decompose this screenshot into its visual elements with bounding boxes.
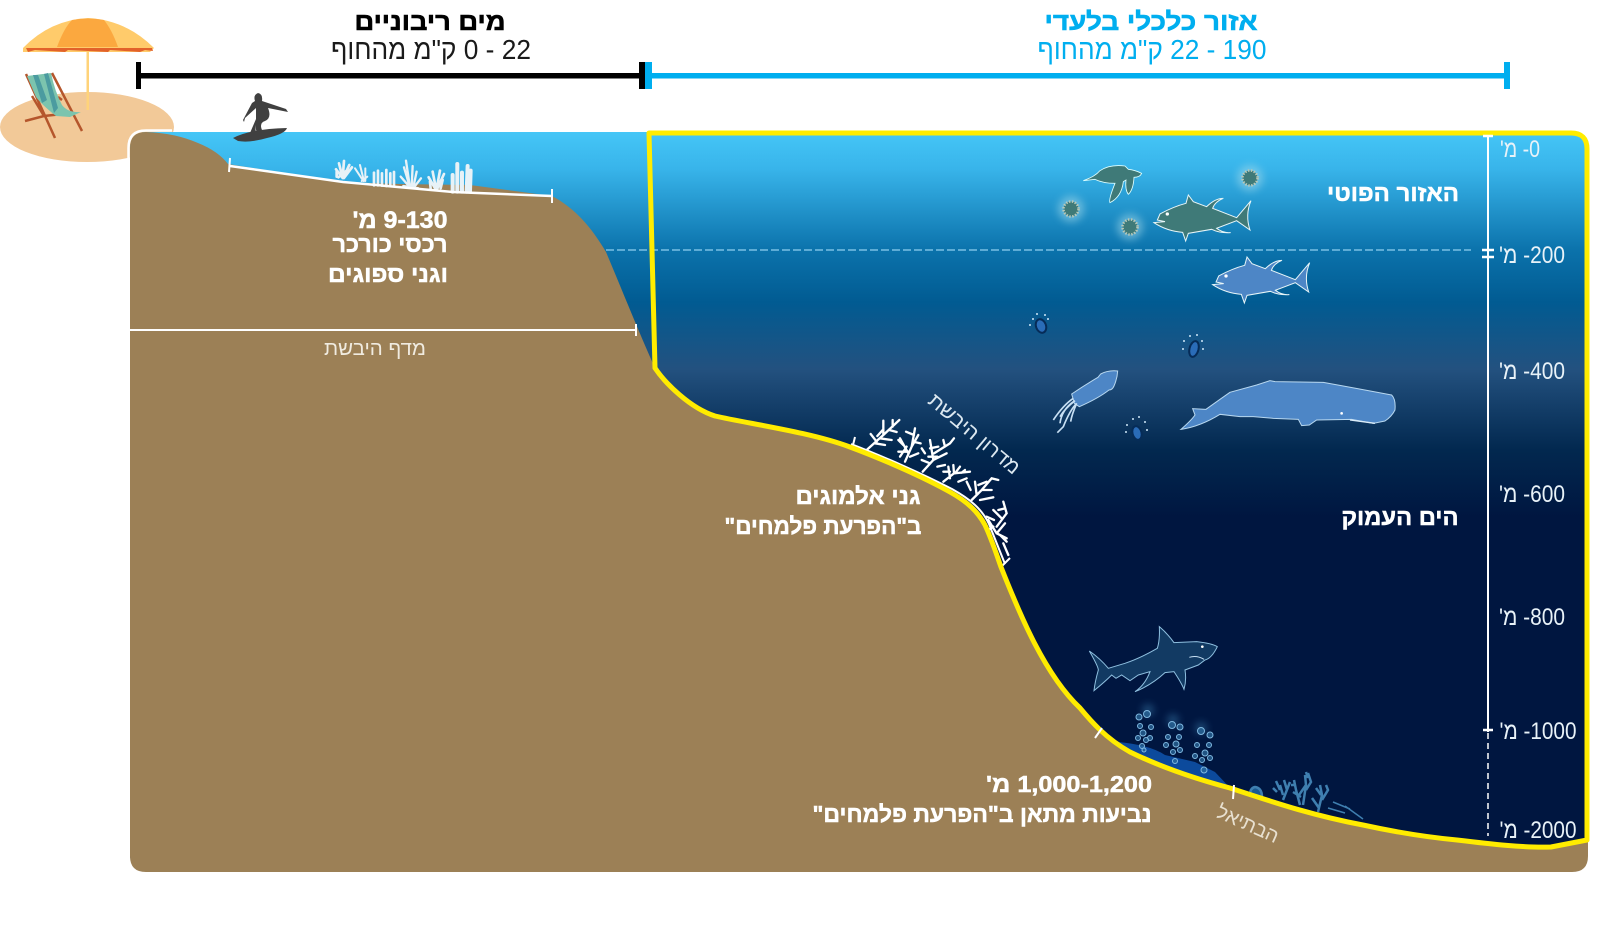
continental shelf bracket: [130, 324, 636, 336]
text: bathyal: הבתיאל: [1213, 801, 1282, 848]
slope end ticks: [1095, 728, 1234, 799]
icon: lower tuna: [1213, 257, 1310, 303]
icon: surfer: [233, 93, 288, 142]
beach chair: [25, 73, 82, 138]
heading: exclusive economic zone: אזור כלכלי בלעדי: [1044, 8, 1258, 36]
icon: squid: [1053, 371, 1118, 433]
icon: shark: [1089, 627, 1217, 692]
surfboard: [233, 128, 287, 142]
icon: small luminous organisms: [1029, 313, 1204, 441]
text: reef depth: 9-130 מ': [352, 207, 448, 234]
icon: turtle: [1083, 166, 1142, 203]
white bracket: reef depth range: [229, 158, 552, 203]
icon: upper tuna: [1154, 195, 1251, 241]
icon: sponge garden: [336, 161, 471, 192]
vent glow: [1142, 704, 1207, 734]
blue seabed mound: [1100, 735, 1240, 805]
text: seep depth: 1,000-1,200 מ': [986, 771, 1152, 797]
text: continental slope: מדרון היבשת: [924, 390, 1024, 479]
depth axis: [1482, 136, 1494, 836]
depth 0: 0- מ': [1500, 136, 1540, 163]
text: methane seeps: נביעות מתאן ב"הפרעת פלמחים": [812, 801, 1152, 827]
icon: white deep corals: [867, 420, 1008, 555]
panel: sea water: [130, 132, 1587, 871]
sand patch: [0, 92, 174, 162]
depth 600: 600- מ': [1499, 481, 1565, 508]
depth 2000: 2000- מ': [1500, 817, 1576, 844]
panel: land and seabed: [128, 130, 1588, 872]
yellow outline: exclusive economic zone: [649, 133, 1587, 847]
photic zone boundary: [606, 249, 1471, 251]
text: territorial waters range: 22 - 0 ק"מ מהחוף: [331, 34, 531, 65]
text: sponge gardens: וגני ספוגים: [328, 261, 448, 287]
white bracket: continental slope: [851, 437, 1010, 566]
surfer body: [243, 93, 288, 134]
bubble columns: [1136, 710, 1213, 773]
depth labels: [1499, 136, 1576, 844]
depth 800: 800- מ': [1499, 604, 1565, 631]
icon: beach with umbrella and chair: [0, 18, 174, 162]
text: photic zone: האזור הפוטי: [1327, 180, 1459, 206]
icon: sperm whale: [1181, 381, 1395, 429]
text: Palmahim disturbance: ב"הפרעת פלמחים": [724, 513, 922, 539]
text: economic zone range: 190 - 22 ק"מ מהחוף: [1038, 34, 1266, 65]
umbrella pole: [86, 48, 89, 110]
text: deep sea: הים העמוק: [1342, 504, 1458, 530]
icon: deep seabed corals: [1250, 772, 1363, 819]
text: coral gardens: גני אלמוגים: [796, 483, 920, 509]
blue bar: exclusive economic zone: [645, 62, 1510, 89]
methane vents and bubbles: [1100, 704, 1240, 805]
heading: territorial waters: מים ריבוניים: [354, 8, 506, 36]
depth 400: 400- מ': [1499, 358, 1565, 385]
depth 1000: 1000- מ': [1500, 718, 1576, 745]
white outline of coast corner: [128, 130, 172, 165]
black bar: territorial waters: [136, 62, 645, 89]
text: continental shelf: מדף היבשת: [324, 338, 426, 360]
icon: plankton: [1058, 165, 1263, 240]
umbrella canopy: [23, 18, 154, 52]
depth 200: 200- מ': [1499, 242, 1565, 269]
text: kurkar ridges: רכסי כורכר: [332, 231, 448, 257]
